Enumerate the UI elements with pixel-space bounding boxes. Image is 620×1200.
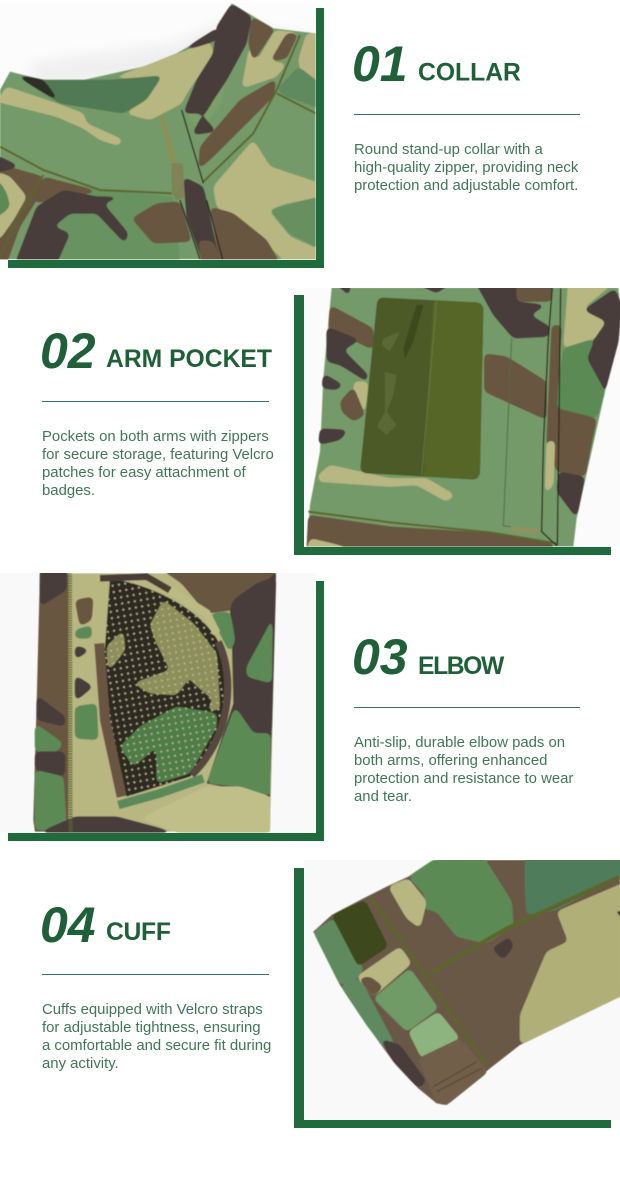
description: and tear. [354,789,412,805]
heading: ARM POCKET [106,346,272,373]
description: for adjustable tightness, ensuring [42,1020,261,1036]
heading: ELBOW [418,653,505,680]
green corner frame [294,868,611,1128]
description: Cuffs equipped with Velcro straps [42,1002,263,1018]
number: 03 [352,629,408,685]
description: protection and adjustable comfort. [354,178,578,194]
green corner frame [294,295,611,555]
photo: sleeve cuff with velcro strap [312,860,620,1106]
description: badges. [42,483,95,499]
description: both arms, offering enhanced [354,753,547,769]
panel: elbow [0,568,580,841]
number: 04 [40,897,96,953]
number: 01 [352,36,408,92]
heading: CUFF [106,919,171,946]
green corner frame [8,8,324,268]
heading: COLLAR [418,60,521,86]
description: any activity. [42,1056,119,1072]
panel: cuff [40,853,620,1128]
description: high-quality zipper, providing neck [354,160,579,176]
green corner frame [8,581,324,841]
photo: sleeve with velcro patch pocket [304,282,620,550]
description: a comfortable and secure fit during [42,1038,271,1054]
description: patches for easy attachment of [42,465,246,481]
number: 02 [40,323,96,379]
panel: arm pocket [40,282,620,555]
description: protection and resistance to wear [354,771,573,787]
panel: collar [0,3,580,268]
description: Anti-slip, durable elbow pads on [354,735,565,751]
description: Pockets on both arms with zippers [42,429,269,445]
description: Round stand-up collar with a [354,142,543,158]
description: for secure storage, featuring Velcro [42,447,274,463]
photo: sleeve with perforated elbow pad [32,573,277,833]
photo: camouflage collar with zipper [0,3,320,263]
